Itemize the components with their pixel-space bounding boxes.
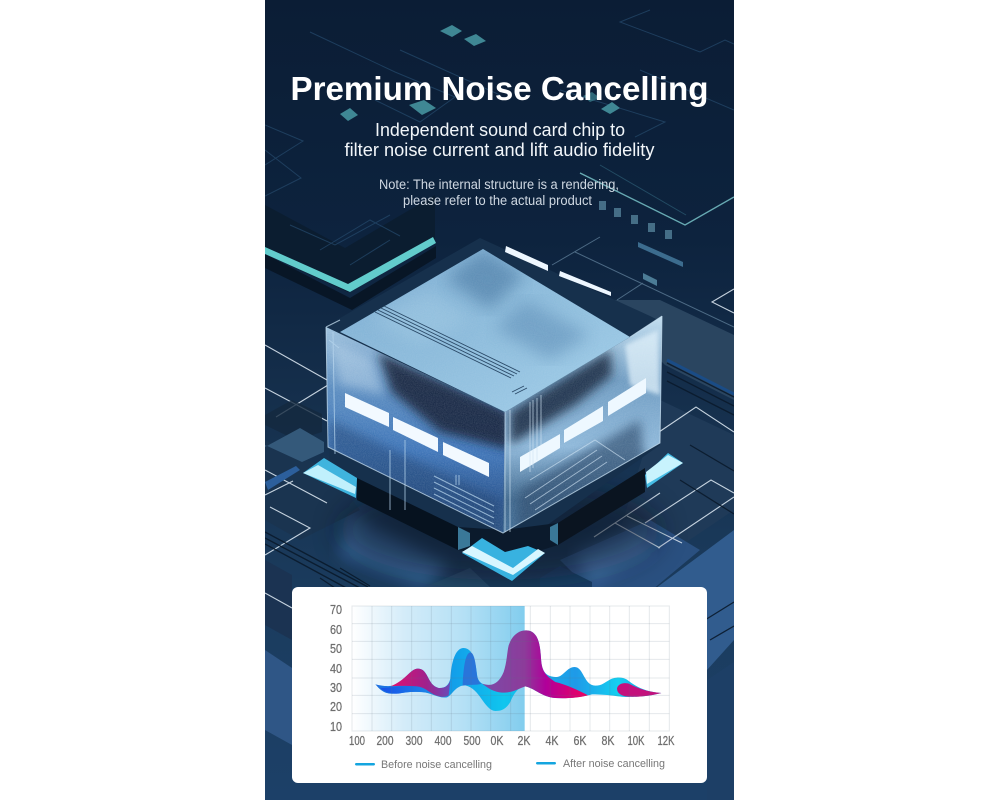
center dark base <box>458 523 558 552</box>
pad: left foot <box>303 458 357 498</box>
right glowing windows <box>520 378 646 472</box>
subtitle: filter noise current and lift audio fidelity <box>344 140 654 160</box>
shaded band <box>352 606 525 731</box>
subtitle: Independent sound card chip to <box>375 120 625 140</box>
faint upper circuit traces <box>265 10 734 196</box>
right cube face <box>503 316 663 535</box>
wave: before and after curves <box>375 630 661 711</box>
grid <box>352 606 669 731</box>
x axis labels: 100 <box>349 734 365 748</box>
x axis labels: 12K <box>658 734 675 748</box>
rear glowing edges <box>505 246 611 296</box>
dark circuit detail on lower board <box>265 363 734 640</box>
title: Premium Noise Cancelling <box>290 71 708 108</box>
board plates <box>265 300 734 745</box>
x axis labels <box>349 734 675 748</box>
left cube face <box>326 327 510 540</box>
cube outline <box>326 316 662 533</box>
subtitle <box>344 120 654 160</box>
panel: noise chart card <box>292 587 707 783</box>
y axis labels: 30 <box>330 681 342 695</box>
pad: bottom foot <box>462 538 545 581</box>
chart area <box>352 606 669 731</box>
y axis labels <box>330 603 342 734</box>
teal components <box>340 25 620 121</box>
upper right chip <box>552 165 734 327</box>
pad: right foot <box>645 453 683 488</box>
x axis labels: 6K <box>574 734 587 748</box>
y axis labels: 40 <box>330 662 342 676</box>
left glowing windows <box>345 393 489 477</box>
left connector block <box>357 478 458 550</box>
x axis labels: 400 <box>434 734 452 748</box>
x axis labels: 10K <box>628 734 645 748</box>
chip: glowing processor cube <box>303 238 683 581</box>
x axis labels: 2K <box>518 734 531 748</box>
x axis labels: 8K <box>602 734 615 748</box>
y axis labels: 60 <box>330 623 342 637</box>
inner dark blue spike <box>463 652 482 686</box>
left magenta hump <box>390 669 450 697</box>
chip shadow <box>340 480 660 580</box>
background panel: circuit board <box>265 0 734 800</box>
x axis labels: 0K <box>490 734 504 748</box>
note: Note: The internal structure is a rendering, <box>379 177 619 192</box>
y axis labels: 70 <box>330 603 342 617</box>
cube top face <box>340 249 630 412</box>
y axis labels: 50 <box>330 642 342 656</box>
x axis labels: 500 <box>464 734 481 748</box>
x axis labels: 4K <box>546 734 559 748</box>
note <box>379 177 619 208</box>
legend: after: After noise cancelling <box>563 758 665 770</box>
x axis labels: 200 <box>376 734 394 748</box>
low blue left <box>380 686 431 694</box>
y axis labels: 10 <box>330 720 342 734</box>
legend: before: Before noise cancelling <box>381 759 492 771</box>
small side components <box>265 400 592 587</box>
right connector block <box>558 468 645 545</box>
white traces on board <box>265 289 734 608</box>
base plate behind cube <box>360 238 660 530</box>
note: please refer to the actual product <box>403 193 592 208</box>
x axis labels: 300 <box>406 734 423 748</box>
tail magenta <box>617 683 661 697</box>
central magenta peak <box>482 630 588 698</box>
y axis labels: 20 <box>330 700 342 714</box>
upper left board with teal edge <box>265 195 436 310</box>
